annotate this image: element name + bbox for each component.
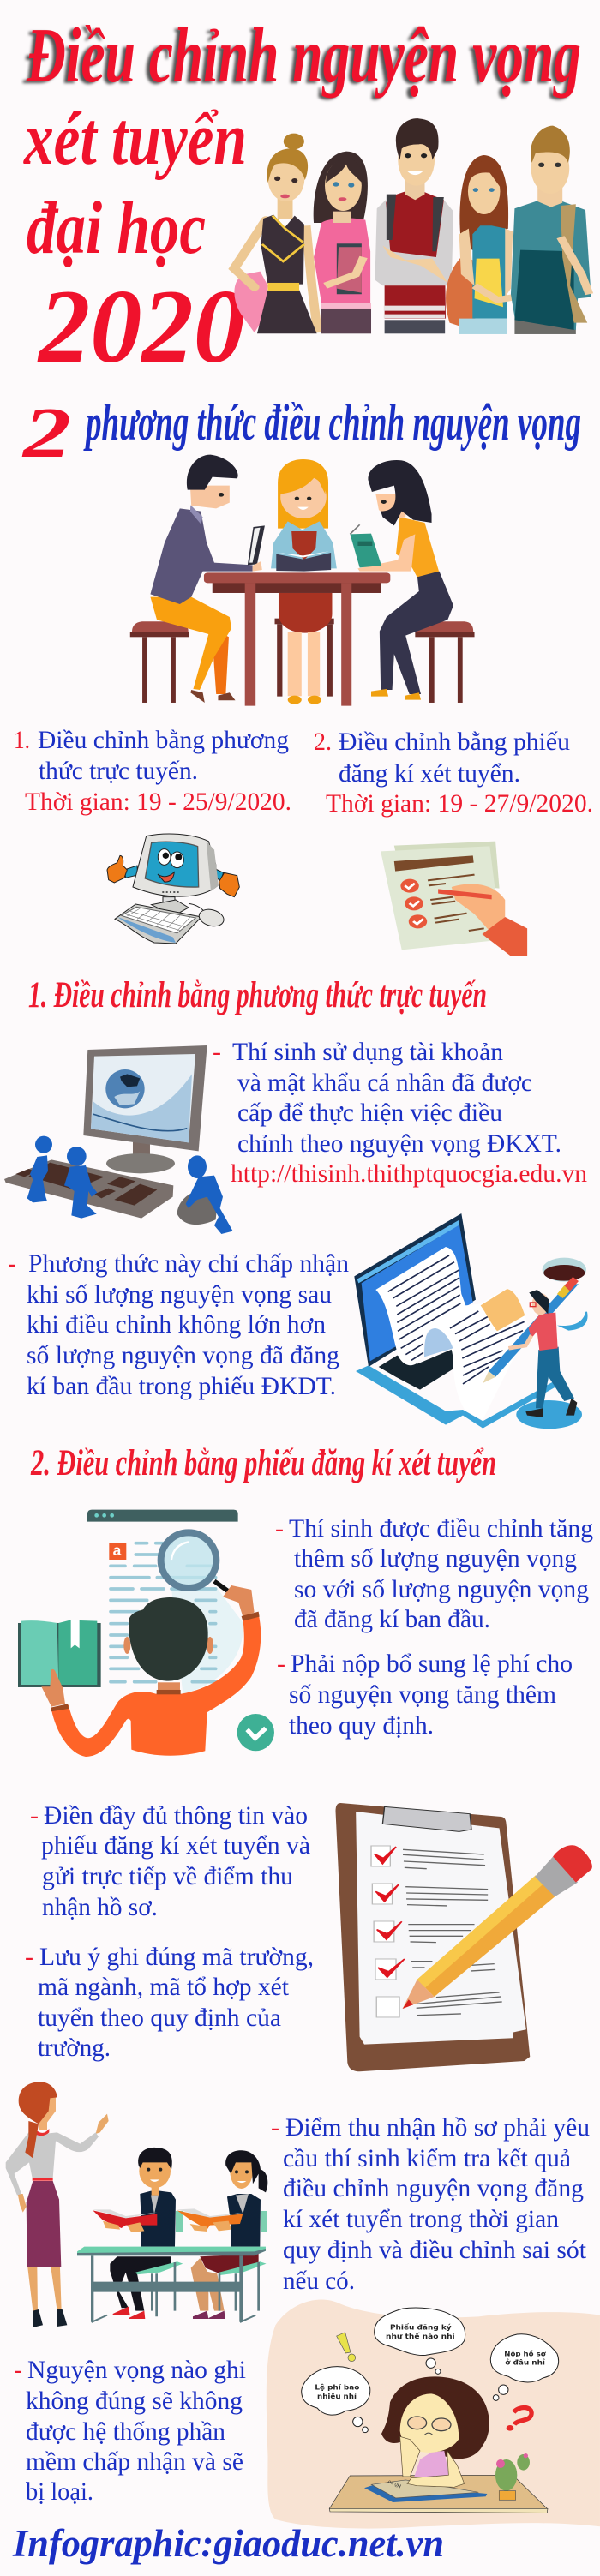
person bbox=[41, 1585, 261, 1757]
text: admission office check: Điểm thu nhận hồ sơ phải yêu bbox=[285, 2113, 590, 2142]
text: admission office check: cầu thí sinh kiểm tra kết quả bbox=[283, 2144, 571, 2172]
illustration: three people reading at a table bbox=[130, 455, 475, 706]
student: girl bbox=[177, 2150, 267, 2319]
text: online method limit: - bbox=[8, 1249, 16, 1278]
text: invalid choices rejected: mềm chấp nhận và sẽ bbox=[26, 2447, 243, 2476]
text: admission office check: quy định và điều chỉnh sai sót bbox=[283, 2236, 587, 2264]
bubble: fee question: nhiêu nhỉ bbox=[317, 2392, 357, 2400]
student: girl in pink bbox=[314, 152, 371, 333]
student: boy in teal shirt bbox=[511, 126, 591, 334]
text: admission office check: nếu có. bbox=[283, 2267, 355, 2295]
blue figures bbox=[27, 1136, 233, 1234]
illustration: person with magnifier and book: a bbox=[113, 1542, 122, 1559]
illustration: monitor with blue figures bbox=[4, 1045, 233, 1234]
table bbox=[204, 572, 390, 706]
text: admission office check: điều chỉnh nguyện vọng đăng bbox=[283, 2174, 584, 2202]
desk bbox=[329, 2475, 548, 2513]
title: xét tuyển bbox=[22, 98, 247, 181]
title: 2020 bbox=[37, 267, 245, 385]
footer credit: Infographic:giaoduc.net.vn bbox=[12, 2522, 444, 2565]
text: section 2 additional fee: - bbox=[277, 1650, 285, 1678]
text: section 2 extra choices: so với số lượng nguyện vọng bbox=[294, 1575, 589, 1603]
text: method 2 summary: Thời gian: 19 - 27/9/2020. bbox=[326, 789, 593, 818]
text: method 2 summary: Điều chỉnh bằng phiếu bbox=[339, 728, 570, 756]
text: correct codes note: Lưu ý ghi đúng mã trường, bbox=[39, 1943, 314, 1971]
student: boy in red jacket bbox=[375, 118, 453, 333]
text: online method login: cấp để thực hiện việc điều bbox=[237, 1099, 502, 1127]
text: online method login: - bbox=[213, 1038, 221, 1066]
text: fill in the form: nhận hồ sơ. bbox=[42, 1893, 158, 1921]
text: fill in the form: Điền đầy đủ thông tin vào bbox=[44, 1801, 308, 1830]
student: girl with backpack bbox=[446, 155, 514, 334]
school desk bbox=[77, 2247, 267, 2322]
bubble: fee question: Lệ phí bao bbox=[315, 2382, 360, 2391]
bubble: form question: như thế nào nhỉ bbox=[386, 2332, 455, 2340]
text: invalid choices rejected: được hệ thống phần bbox=[26, 2417, 225, 2446]
title bbox=[22, 12, 581, 385]
blonde woman with book bbox=[271, 459, 337, 704]
bubble: form question bbox=[375, 2308, 465, 2374]
magnifier bbox=[161, 1532, 230, 1592]
open book bbox=[18, 1620, 101, 1687]
text: method 1 summary: Điều chỉnh bằng phương bbox=[38, 726, 289, 754]
text: invalid choices rejected: - bbox=[14, 2356, 22, 2384]
text: correct codes note: tuyển theo quy định của bbox=[38, 2004, 281, 2032]
man with tablet bbox=[150, 455, 265, 703]
background blob: beige panel bbox=[267, 2300, 600, 2529]
text: section 2 additional fee: Phải nộp bổ sung lệ phí cho bbox=[291, 1650, 573, 1678]
text: fill in the form: gửi trực tiếp về điểm thu bbox=[42, 1862, 293, 1890]
text: correct codes note bbox=[25, 1943, 314, 2062]
text: method 1 summary: Thời gian: 19 - 25/9/2020. bbox=[25, 788, 291, 816]
illustration: clipboard with pencil bbox=[335, 1803, 592, 2071]
title: đại học bbox=[27, 187, 206, 270]
illustration: worried girl with thought bubbles bbox=[302, 2308, 559, 2513]
text: section 2 additional fee bbox=[277, 1650, 573, 1740]
subheading: 2 methods bbox=[21, 393, 581, 473]
text: online method limit bbox=[8, 1249, 349, 1400]
text: online method login: http://thisinh.thithptquocgia.edu.vn bbox=[231, 1159, 587, 1188]
text: correct codes note: - bbox=[25, 1943, 33, 1971]
text: method 1 summary bbox=[14, 726, 291, 816]
text: method 2 summary: 2. bbox=[314, 728, 332, 756]
bubble: where to submit bbox=[490, 2334, 559, 2400]
cactus bbox=[495, 2453, 530, 2500]
text: online method limit: Phương thức này chỉ chấp nhận bbox=[28, 1249, 349, 1278]
illustration: laptop document with person and pencil bbox=[354, 1213, 588, 1429]
text: admission office check: kí xét tuyển trong thời gian bbox=[283, 2205, 559, 2233]
stools bbox=[130, 619, 475, 703]
bubble: fee question bbox=[302, 2367, 370, 2433]
text: online method limit: khi điều chỉnh không lớn hơn bbox=[27, 1310, 326, 1339]
bubble: form question: Phiếu đăng ký bbox=[390, 2322, 452, 2331]
subheading: 2 methods: 2 bbox=[21, 393, 71, 473]
student: girl with bun bbox=[234, 134, 318, 333]
text: online method login bbox=[213, 1038, 587, 1188]
bubble: where to submit: ở đâu nhỉ bbox=[505, 2357, 545, 2366]
bubble: where to submit: Nộp hồ sơ bbox=[504, 2349, 546, 2357]
marks bbox=[337, 2333, 531, 2431]
woman with green book bbox=[350, 460, 453, 700]
text: section 2 additional fee: số nguyện vọng tăng thêm bbox=[289, 1680, 556, 1709]
student: boy bbox=[93, 2148, 176, 2319]
text: section 2 extra choices: thêm số lượng nguyện vọng bbox=[294, 1544, 577, 1573]
icon: computer mascot bbox=[107, 834, 239, 944]
text: method 2 summary: đăng kí xét tuyển. bbox=[339, 759, 520, 788]
text: invalid choices rejected: không đúng sẽ không bbox=[26, 2387, 243, 2415]
illustration: person with magnifier and book bbox=[18, 1510, 274, 1757]
pencil bbox=[483, 1277, 579, 1383]
text: online method limit: số lượng nguyện vọng đã đăng bbox=[27, 1341, 339, 1369]
text: online method limit: kí ban đầu trong phiếu ĐKDT. bbox=[27, 1372, 336, 1400]
text: section 2 additional fee: theo quy định. bbox=[289, 1711, 434, 1740]
text: correct codes note: mã ngành, mã tổ hợp xét bbox=[38, 1973, 290, 2001]
text: fill in the form bbox=[30, 1801, 310, 1921]
text: correct codes note: trường. bbox=[38, 2034, 111, 2062]
text: fill in the form: phiếu đăng kí xét tuyển và bbox=[41, 1831, 310, 1860]
text: admission office check bbox=[271, 2113, 590, 2295]
text: online method limit: khi số lượng nguyện vọng sau bbox=[27, 1280, 332, 1309]
text: method 1 summary: 1. bbox=[14, 726, 30, 754]
pencil bbox=[403, 1845, 592, 2009]
text: section 2 extra choices: Thí sinh được điều chỉnh tăng bbox=[289, 1514, 593, 1543]
text: section 2 extra choices: đã đăng kí ban đầu. bbox=[294, 1605, 490, 1633]
text: section 2 extra choices: - bbox=[275, 1514, 284, 1543]
icon: green check badge bbox=[237, 1714, 274, 1751]
text: invalid choices rejected: Nguyện vọng nào ghi bbox=[27, 2356, 246, 2384]
text: fill in the form: - bbox=[30, 1801, 39, 1830]
teacher bbox=[6, 2082, 109, 2327]
text: method 1 summary: thức trực tuyến. bbox=[39, 757, 198, 785]
desk: Hồ sơ bbox=[387, 2478, 402, 2488]
illustration: teacher and students at desk bbox=[6, 2082, 267, 2327]
illustration: five students bbox=[234, 118, 591, 334]
text: online method login: Thí sinh sử dụng tài khoản bbox=[232, 1038, 503, 1066]
chairs bbox=[176, 2211, 267, 2232]
text: online method login: và mật khẩu cá nhân đã được bbox=[237, 1069, 532, 1097]
text: invalid choices rejected bbox=[14, 2356, 246, 2506]
icon: checklist form with hand bbox=[381, 842, 527, 956]
text: invalid choices rejected: bị loại. bbox=[26, 2477, 93, 2506]
person bbox=[508, 1290, 577, 1417]
text: online method login: chỉnh theo nguyện vọng ĐKXT. bbox=[237, 1129, 561, 1158]
text: admission office check: - bbox=[271, 2113, 279, 2142]
girl bbox=[381, 2376, 489, 2487]
text: section 2 extra choices bbox=[275, 1514, 593, 1633]
text: method 2 summary bbox=[314, 728, 593, 818]
